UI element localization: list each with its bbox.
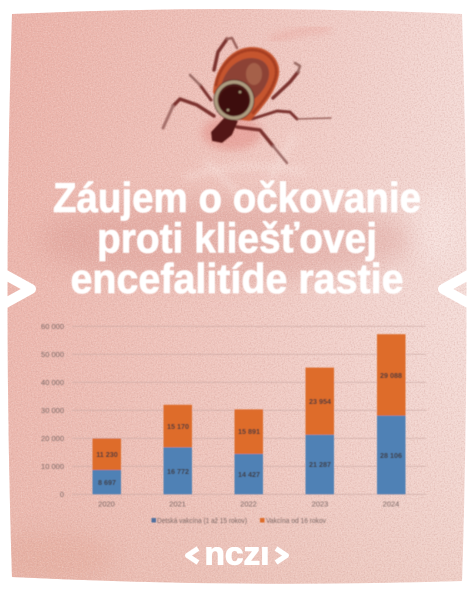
x axis labels: 2022 <box>240 500 257 508</box>
bar value labels: 23 954 <box>309 397 331 406</box>
bars <box>92 334 406 494</box>
bar value labels: 11 230 <box>96 450 118 459</box>
y axis labels: 30 000 <box>41 406 64 415</box>
x axis labels: 2021 <box>169 500 186 508</box>
bar chart <box>41 322 426 525</box>
y axis labels: 10 000 <box>41 462 64 471</box>
legend: Detská vakcína (1 až 15 rokov) <box>157 516 247 525</box>
title: encefalitíde rastie <box>70 255 404 302</box>
y axis labels: 0 <box>60 490 64 499</box>
y axis labels <box>41 322 64 499</box>
y axis labels: 60 000 <box>41 322 64 331</box>
bar value labels: 15 170 <box>167 422 189 431</box>
title: Záujem o očkovanie <box>53 174 421 221</box>
x axis labels <box>98 500 399 508</box>
logo: nczi: nczi <box>204 536 270 572</box>
tick body <box>213 47 279 121</box>
title: proti kliešťovej <box>97 214 377 262</box>
bar value labels: 29 088 <box>380 371 402 380</box>
bar value labels: 21 287 <box>309 460 331 469</box>
x axis labels: 2024 <box>383 500 399 508</box>
legend: Vakcína od 16 rokov <box>266 516 326 525</box>
icon: left chevron <box>2 273 31 305</box>
title <box>53 174 421 302</box>
bar value labels: 8 697 <box>98 478 116 487</box>
tick scutum <box>214 80 254 120</box>
legend <box>152 516 326 525</box>
tick mouthparts <box>211 118 238 143</box>
y axis labels: 40 000 <box>41 378 64 387</box>
bar value labels: 16 772 <box>167 467 189 476</box>
icon: right chevron <box>443 273 472 305</box>
icon: tick <box>163 38 331 163</box>
bar value labels: 14 427 <box>238 470 260 479</box>
y axis labels: 50 000 <box>41 350 64 359</box>
logo: nczi <box>185 546 289 566</box>
tick legs <box>163 38 331 163</box>
bar value labels: 15 891 <box>238 427 260 436</box>
bar value labels <box>96 371 402 487</box>
bar value labels: 28 106 <box>380 451 402 460</box>
x axis labels: 2020 <box>98 500 115 508</box>
x axis labels: 2023 <box>312 500 328 508</box>
y axis labels: 20 000 <box>41 434 64 443</box>
